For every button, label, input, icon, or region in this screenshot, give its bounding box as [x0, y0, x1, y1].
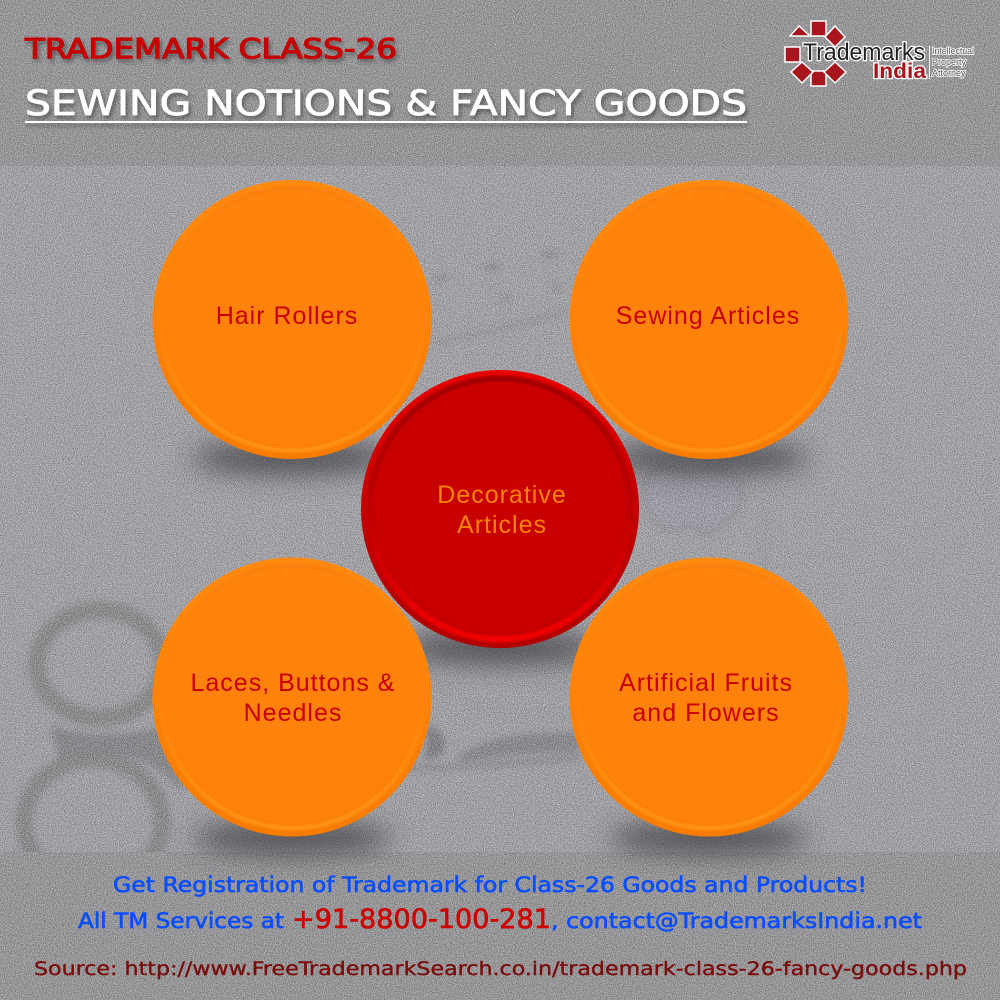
- circle: decorative articles: Articles: [457, 511, 547, 539]
- logo: Trademarks India: [785, 21, 974, 86]
- logo tagline: [932, 46, 974, 78]
- circle: decorative articles: [361, 370, 639, 648]
- blade lower edge: [405, 758, 580, 768]
- scissors lower ring: [24, 759, 162, 885]
- logo tagline: Attorney: [932, 68, 966, 78]
- circle shadows: [192, 442, 809, 854]
- logo mark: [785, 21, 846, 86]
- heading: sewing notions: SEWING NOTIONS & FANCY GOODS: [25, 84, 747, 124]
- logo tagline: Property: [932, 57, 967, 67]
- circle: laces buttons needles: Needles: [244, 699, 342, 727]
- scissors blade: [460, 732, 580, 762]
- faint thread marks: [433, 251, 560, 301]
- title: trademark class: TRADEMARK CLASS-26: [24, 32, 397, 65]
- dark pivot: [425, 722, 445, 762]
- circle: sewing articles: Sewing Articles: [616, 302, 800, 330]
- circle: artificial fruits and flowers: Artificial Fruits: [619, 669, 793, 697]
- circle: artificial fruits and flowers: [570, 558, 848, 836]
- circle: laces buttons needles: Laces, Buttons &: [190, 669, 396, 697]
- call to action line: Get Registration of Trademark for Class-26 Goods and Products!: [113, 873, 867, 897]
- contact line: All TM Services at: [78, 909, 284, 933]
- circle: sewing articles: [570, 180, 848, 459]
- contact line: [78, 904, 922, 935]
- background photo: faded scissors and flower: [24, 251, 765, 885]
- circle: laces buttons needles: [152, 558, 432, 836]
- shadow between rings: [50, 726, 184, 788]
- phone number: +91-8800-100-281: [292, 904, 551, 935]
- circle: hair rollers: [152, 180, 432, 459]
- source line: Source: http://www.FreeTrademarkSearch.co.in/trademark-class-26-fancy-goods.php: [34, 958, 967, 980]
- logo tagline: Intellectual: [932, 46, 974, 56]
- logo: Trademarks India: India: [873, 60, 926, 83]
- circle: hair rollers: Hair Rollers: [216, 302, 358, 330]
- contact line: , contact@TrademarksIndia.net: [551, 909, 922, 933]
- circle: decorative articles: Decorative: [437, 481, 567, 509]
- faint flower: [642, 497, 742, 533]
- blade upper edge: [435, 690, 580, 718]
- circle: artificial fruits and flowers: and Flowers: [632, 699, 780, 727]
- scissors upper ring: [37, 610, 163, 718]
- logo wordmark: Trademarks: [803, 39, 925, 66]
